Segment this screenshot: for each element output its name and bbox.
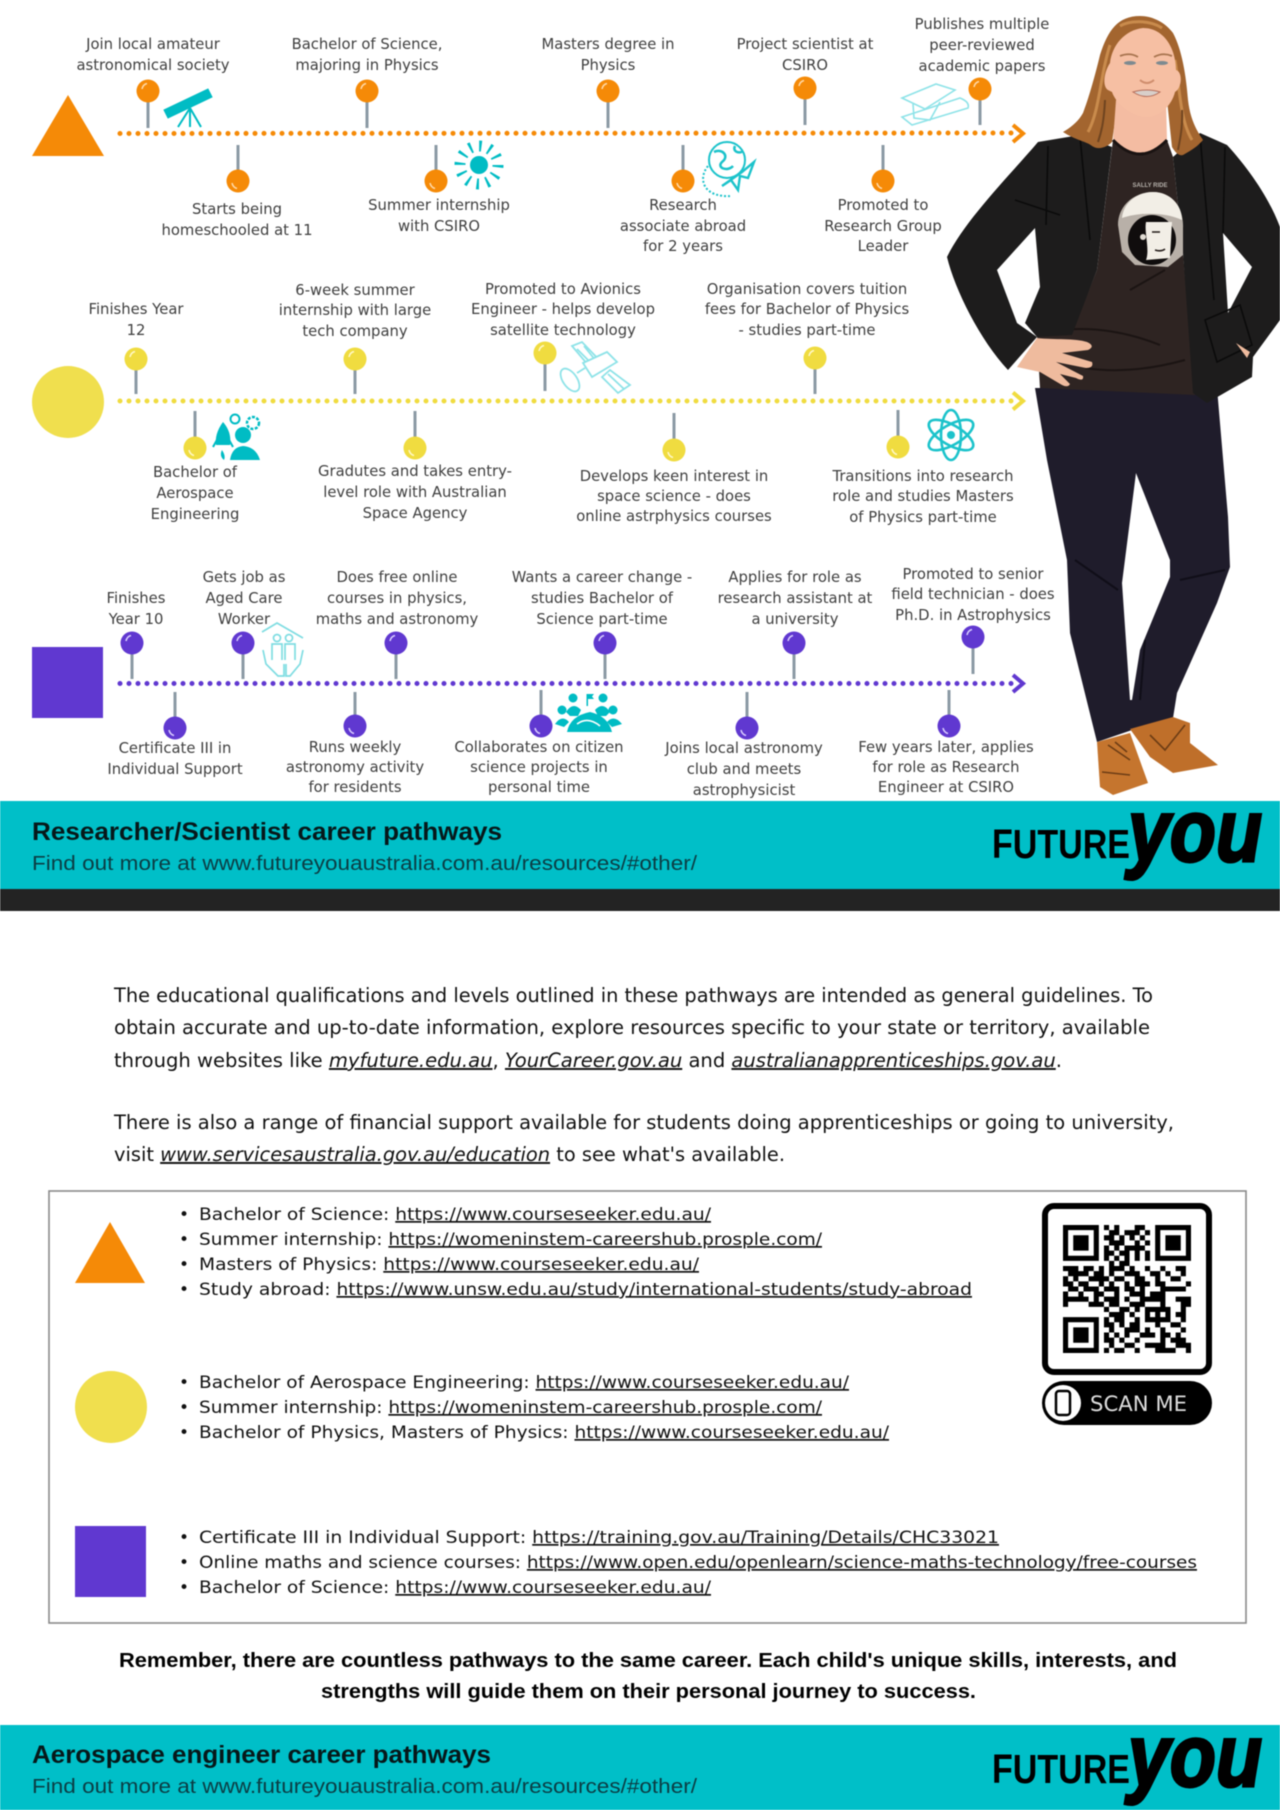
logo: FutureYou: FUTURE xyxy=(992,1746,1130,1792)
intro paragraph: financial support: There is also a range of financial support available for students doing apprenticeships or going to university, xyxy=(113,1111,1174,1134)
milestone: Summer internship: with CSIRO xyxy=(398,218,480,235)
link text: Find out more at www.futureyouaustralia.com.au/resources/#other/ xyxy=(32,1776,697,1798)
milestone: Transitions into research role: of Physics part-time xyxy=(849,509,997,526)
milestone: Career change: Science part-time xyxy=(536,611,668,628)
milestone: Finishes Year 10 xyxy=(107,590,165,679)
links list: orange pathway: • xyxy=(179,1205,189,1225)
milestone: Join local amateur astronomical society: Join local amateur xyxy=(85,36,221,53)
milestone: Finishes Year 12: Finishes Year xyxy=(89,301,184,318)
milestone: Masters degree: Masters degree in xyxy=(542,36,674,53)
links list: orange pathway: Summer internship: https://womeninstem-careershub.prosple.com/ xyxy=(199,1230,822,1250)
milestone: Career change xyxy=(512,569,692,679)
footer band: Aerospace engineer career pathways xyxy=(0,1706,1280,1810)
milestone: Promoted to Research Group Leader: Research Group xyxy=(824,218,942,235)
scan me button: SCAN ME xyxy=(1090,1392,1187,1416)
milestone: Weekly astronomy activity: astronomy activity xyxy=(286,759,424,776)
milestone: Senior field technician: Ph.D. in Astrophysics xyxy=(895,607,1051,624)
shape: purple square key xyxy=(75,1526,146,1597)
links list: yellow pathway: • xyxy=(179,1398,189,1418)
links list: orange pathway: Masters of Physics: https://www.courseseeker.edu.au/ xyxy=(199,1255,699,1275)
intro paragraph: financial support xyxy=(113,1111,1174,1166)
milestone: Masters degree: Physics xyxy=(581,57,635,74)
smile xyxy=(1133,90,1160,96)
milestone: Joins astronomy club: astrophysicist xyxy=(693,782,795,799)
icon: telescope xyxy=(164,89,212,127)
scan me button xyxy=(1042,1381,1212,1425)
pathway 3: purple square row xyxy=(32,566,1055,799)
milestone: Bachelor of Science: Bachelor of Science, xyxy=(292,36,442,53)
milestone: Research Engineer at CSIRO: for role as Research xyxy=(872,759,1020,776)
milestone: Promoted to Avionics Engineer: Promoted to Avionics xyxy=(485,281,641,298)
milestone: Publishes papers: academic papers xyxy=(919,58,1045,75)
links list: orange pathway: Bachelor of Science: https://www.courseseeker.edu.au/ xyxy=(199,1205,711,1225)
milestone: Certificate III: Individual Support xyxy=(107,761,243,778)
milestone: Join local amateur astronomical society: astronomical society xyxy=(76,57,230,74)
milestone: Joins astronomy club xyxy=(664,692,823,799)
milestone: Research Engineer at CSIRO: Few years later, applies xyxy=(858,739,1034,756)
milestone: Weekly astronomy activity: for residents xyxy=(308,779,402,796)
milestone: Promoted to Research Group Leader: Leader xyxy=(858,238,909,255)
milestone: 6-week summer internship: 6-week summer xyxy=(295,282,416,299)
icon: engineer, rocket and gears xyxy=(213,414,260,460)
jacket: right side and sleeve xyxy=(1173,133,1280,403)
t-shirt print: astronaut helmet: SALLY RIDE xyxy=(1132,183,1168,189)
milestone: Research associate: Research xyxy=(649,197,717,214)
milestone: Citizen science xyxy=(454,690,624,796)
dark divider band xyxy=(0,889,1280,911)
milestone: Bachelor of Aerospace Engineering: Engineering xyxy=(151,506,239,523)
milestone: Joins astronomy club: Joins local astronomy xyxy=(664,740,823,757)
milestone: Join local amateur astronomical society xyxy=(76,36,230,128)
closing statement: Remember, there are countless pathways to the same career. Each child's unique skills, interests, and xyxy=(119,1650,1177,1672)
icon: satellite xyxy=(557,342,630,395)
milestone: Research associate xyxy=(620,145,746,255)
milestone: Graduates and takes entry-level role: Gradutes and takes entry- xyxy=(318,463,512,480)
intro paragraph: qualifications: obtain accurate and up-to-date information, explore resources specific to your state or territory, available xyxy=(114,1016,1150,1039)
milestone: Aged Care Worker: Aged Care xyxy=(206,590,282,607)
pathway 1: orange triangle row xyxy=(32,16,1049,255)
milestone: Promoted to Research Group Leader xyxy=(824,145,942,255)
milestone: Finishes Year 10: Finishes xyxy=(107,590,165,607)
milestone: Research Engineer at CSIRO: Engineer at CSIRO xyxy=(878,779,1014,796)
milestone: Free online courses xyxy=(316,569,479,679)
arrow: orange dotted timeline xyxy=(120,125,1023,142)
milestone: Research assistant xyxy=(718,569,873,679)
links list: purple pathway: Online maths and science courses: https://www.open.edu/openlearn/science-maths-technology/free-courses xyxy=(199,1553,1197,1573)
intro paragraph: qualifications xyxy=(113,984,1153,1072)
trousers xyxy=(1035,388,1230,742)
shirt collar xyxy=(1113,140,1167,154)
links list: orange pathway xyxy=(179,1205,972,1300)
milestone: Project scientist xyxy=(737,36,874,125)
milestone: Finishes Year 12: 12 xyxy=(127,322,145,339)
links list: yellow pathway: Bachelor of Aerospace Engineering: https://www.courseseeker.edu.au/ xyxy=(199,1373,849,1393)
logo: FutureYou xyxy=(992,1706,1262,1805)
milestone: Develops keen interest xyxy=(576,413,772,525)
milestone: 6-week summer internship: internship with large xyxy=(279,302,431,319)
nose xyxy=(1140,80,1154,83)
arrow: purple dotted timeline xyxy=(120,675,1023,692)
illustration: woman scientist standing with hands on hips xyxy=(947,16,1280,795)
milestone: Senior field technician: field technician - does xyxy=(891,586,1055,603)
milestone: Research Engineer at CSIRO xyxy=(858,690,1034,796)
milestone: Research assistant: research assistant at xyxy=(718,590,873,607)
hair xyxy=(1063,16,1203,155)
heading: Researcher/Scientist career pathways xyxy=(32,818,502,846)
icon: graduation cap and scroll xyxy=(902,84,968,125)
hand xyxy=(1017,338,1092,386)
milestone: Organisation covers tuition: - studies part-time xyxy=(738,322,876,339)
milestone: Transitions into research role xyxy=(831,410,1014,526)
links list: purple pathway: Bachelor of Science: https://www.courseseeker.edu.au/ xyxy=(199,1578,711,1598)
milestone: Finishes Year 10: Year 10 xyxy=(108,611,163,628)
milestone: Research associate: for 2 years xyxy=(643,238,723,255)
milestone: Publishes papers: peer-reviewed xyxy=(929,37,1035,54)
shoe: left xyxy=(1097,733,1148,795)
face xyxy=(1104,28,1181,117)
eyes and brows xyxy=(1120,54,1172,57)
milestone: Project scientist: CSIRO xyxy=(782,57,828,74)
pathway 2: yellow circle row xyxy=(32,281,1023,526)
QR code xyxy=(1045,1206,1209,1372)
shoe: right xyxy=(1130,717,1218,773)
intro paragraph: financial support: visit www.servicesaustralia.gov.au/education to see what's available. xyxy=(114,1143,785,1166)
milestone: Graduates and takes entry-level role: Space Agency xyxy=(363,505,468,522)
milestone: Publishes papers: Publishes multiple xyxy=(915,16,1049,33)
logo: FutureYou: you xyxy=(1125,781,1262,880)
t-shirt xyxy=(1037,140,1195,395)
milestone: Free online courses: courses in physics, xyxy=(327,590,467,607)
intro paragraph: qualifications: through websites like myfuture.edu.au, YourCareer.gov.au and australianapprenticeships.gov.au. xyxy=(114,1049,1062,1072)
intro paragraph: qualifications: The educational qualifications and levels outlined in these pathways are intended as general guidelines. To xyxy=(113,984,1153,1007)
milestone: Starts being homeschooled: Starts being xyxy=(192,201,282,218)
milestone: Transitions into research role: Transitions into research xyxy=(831,468,1014,485)
links list: orange pathway: Study abroad: https://www.unsw.edu.au/study/international-students/study-abroad xyxy=(199,1280,972,1300)
link text: Find out more at www.futureyouaustralia.com.au/resources/#other/ xyxy=(32,853,697,875)
milestone: Citizen science: personal time xyxy=(488,779,590,796)
milestone: Senior field technician xyxy=(891,566,1055,674)
shape: yellow circle xyxy=(32,366,104,438)
milestone: Promoted to Avionics Engineer: Engineer - helps develop xyxy=(471,301,655,318)
milestone: Organisation covers tuition xyxy=(705,281,909,394)
milestone: Promoted to Avionics Engineer: satellite technology xyxy=(490,322,636,339)
milestone: Weekly astronomy activity: Runs weekly xyxy=(309,739,402,756)
milestone: Promoted to Avionics Engineer xyxy=(471,281,655,391)
milestone: 6-week summer internship xyxy=(279,282,431,394)
closing statement: strengths will guide them on their personal journey to success. xyxy=(321,1681,976,1703)
milestone: Certificate III xyxy=(107,692,243,778)
milestone: Bachelor of Aerospace Engineering xyxy=(151,411,239,523)
milestone: Aged Care Worker: Worker xyxy=(218,611,271,628)
other hand: finger tips xyxy=(1236,343,1250,358)
milestone: Starts being homeschooled xyxy=(162,145,312,239)
links list: yellow pathway xyxy=(179,1373,889,1443)
milestone: Research assistant: Applies for role as xyxy=(728,569,862,586)
milestone: Aged Care Worker: Gets job as xyxy=(203,569,285,586)
links list: purple pathway xyxy=(179,1528,1197,1598)
milestone: Publishes papers xyxy=(915,16,1049,125)
links list: purple pathway: • xyxy=(179,1578,189,1598)
icon: caring hands and house xyxy=(262,623,303,676)
milestone: Transitions into research role: role and studies Masters xyxy=(832,488,1014,505)
neck xyxy=(1113,100,1167,153)
milestone: Bachelor of Science xyxy=(292,36,442,128)
milestone: Career change: studies Bachelor of xyxy=(531,590,674,607)
milestone: Bachelor of Aerospace Engineering: Bachelor of xyxy=(153,464,238,481)
shape: yellow circle key xyxy=(75,1371,147,1443)
milestone: Promoted to Research Group Leader: Promoted to xyxy=(838,197,928,214)
milestone: Senior field technician: Promoted to senior xyxy=(903,566,1044,583)
links list: yellow pathway: Bachelor of Physics, Masters of Physics: https://www.courseseeker.edu.au/ xyxy=(199,1423,889,1443)
milestone: Certificate III: Certificate III in xyxy=(119,740,231,757)
shape: orange triangle xyxy=(32,95,104,156)
links list: yellow pathway: • xyxy=(179,1373,189,1393)
jacket: left side and sleeve xyxy=(947,135,1112,370)
heading: Aerospace engineer career pathways xyxy=(32,1741,491,1769)
shape: orange triangle key xyxy=(75,1222,145,1283)
milestone: Develops keen interest: online astrphysics courses xyxy=(576,508,772,525)
gap between right sleeve and body xyxy=(1223,233,1252,313)
milestone: Graduates and takes entry-level role xyxy=(318,411,512,522)
milestone: Citizen science: science projects in xyxy=(470,759,608,776)
milestone: Project scientist: Project scientist at xyxy=(737,36,874,53)
milestone: Career change: Wants a career change - xyxy=(512,569,692,586)
milestone: 6-week summer internship: tech company xyxy=(302,323,408,340)
milestone: Starts being homeschooled: homeschooled at 11 xyxy=(162,222,312,239)
milestone: Research associate: associate abroad xyxy=(620,218,746,235)
milestone: Free online courses: maths and astronomy xyxy=(316,611,479,628)
shape: purple square xyxy=(32,647,103,718)
milestone: Summer internship: Summer internship xyxy=(368,197,510,214)
icon: globe and plane xyxy=(703,142,754,196)
milestone: Aged Care Worker xyxy=(203,569,285,679)
t-shirt print: astronaut helmet xyxy=(1118,183,1183,267)
links list: yellow pathway: Summer internship: https://womeninstem-careershub.prosple.com/ xyxy=(199,1398,822,1418)
links list: purple pathway: Certificate III in Individual Support: https://training.gov.au/Training/Details/CHC33021 xyxy=(199,1528,999,1548)
milestone: Organisation covers tuition: fees for Bachelor of Physics xyxy=(705,301,909,318)
milestone: Finishes Year 12 xyxy=(89,301,184,394)
milestone: Bachelor of Science: majoring in Physics xyxy=(295,57,439,74)
links list: orange pathway: • xyxy=(179,1280,189,1300)
arrow: yellow dotted timeline xyxy=(120,392,1023,410)
jacket seams xyxy=(1015,135,1252,362)
milestone: Summer internship xyxy=(368,145,510,235)
milestone: Citizen science: Collaborates on citizen xyxy=(454,739,624,756)
links list: orange pathway: • xyxy=(179,1255,189,1275)
milestone: Free online courses: Does free online xyxy=(337,569,457,586)
milestone: Develops keen interest: space science - does xyxy=(597,488,751,505)
icon: sun xyxy=(460,146,498,184)
icon: atom xyxy=(924,410,978,460)
links list: purple pathway: • xyxy=(179,1528,189,1548)
milestone: Organisation covers tuition: Organisation covers tuition xyxy=(707,281,907,298)
milestone: Graduates and takes entry-level role: level role with Australian xyxy=(323,484,507,501)
milestone: Bachelor of Aerospace Engineering: Aerospace xyxy=(156,485,234,502)
milestone: Masters degree xyxy=(542,36,674,128)
panel: links box xyxy=(49,1191,1246,1623)
links list: orange pathway: • xyxy=(179,1230,189,1250)
logo: FutureYou: FUTURE xyxy=(992,821,1130,867)
footer band: Researcher/Scientist career pathways xyxy=(0,781,1280,889)
milestone: Joins astronomy club: club and meets xyxy=(687,761,801,778)
closing statement xyxy=(119,1650,1177,1703)
logo: FutureYou xyxy=(992,781,1262,880)
milestone: Weekly astronomy activity xyxy=(286,692,424,796)
links list: yellow pathway: • xyxy=(179,1423,189,1443)
milestone: Research assistant: a university xyxy=(752,611,839,628)
icon: citizen science group xyxy=(555,694,622,732)
links list: purple pathway: • xyxy=(179,1553,189,1573)
logo: FutureYou: you xyxy=(1125,1706,1262,1805)
milestone: Develops keen interest: Develops keen interest in xyxy=(580,468,768,485)
